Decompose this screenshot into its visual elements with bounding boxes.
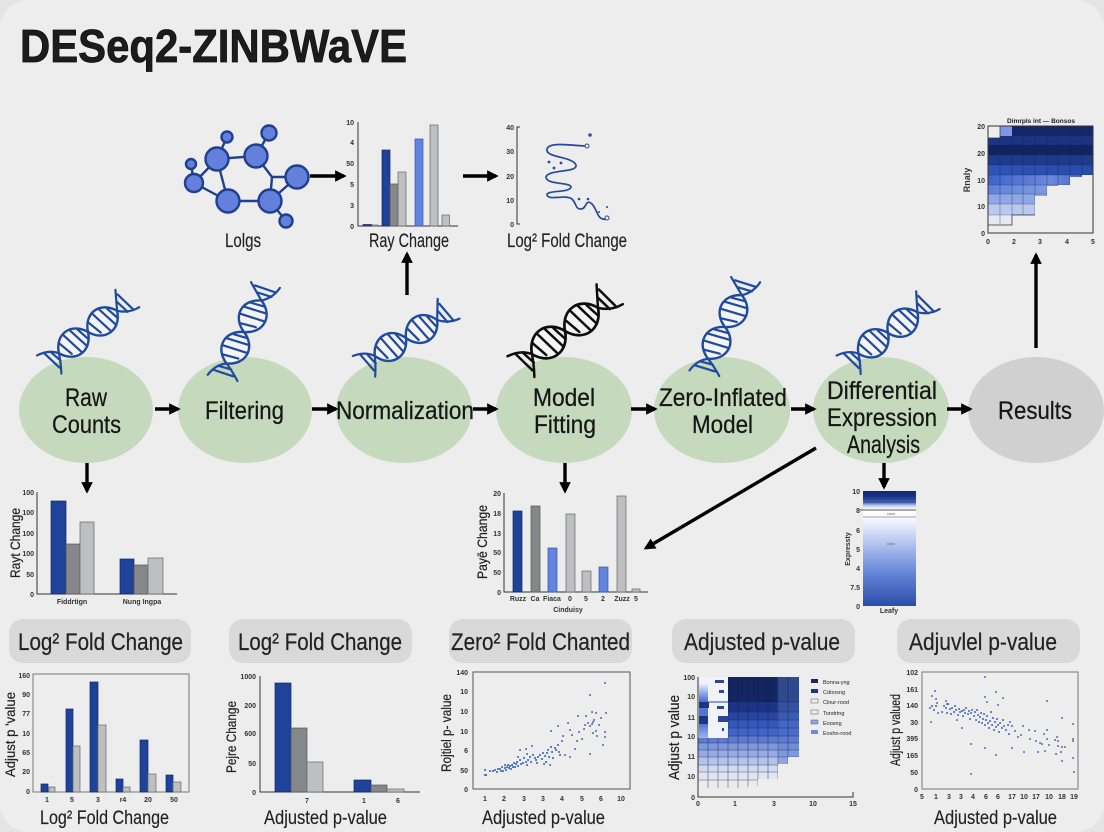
chart: bottom heatmap with legend: 11 xyxy=(688,715,695,722)
arrow: differential to middle chart xyxy=(646,448,816,548)
chart: grouped bars bottom: 200 xyxy=(244,703,256,710)
chart: grouped bars bottom: Pejre Change xyxy=(223,701,239,773)
chart: top right heatmap: 10 xyxy=(977,204,985,211)
node: results: Results xyxy=(998,397,1072,425)
arrow: normalization to model fitting xyxy=(473,407,496,411)
chart: top right heatmap: Rnaly xyxy=(962,168,972,192)
chart: paired bars bottom left: 5 xyxy=(70,797,74,804)
chart: falling scatter plot: 30 xyxy=(910,720,918,727)
chart: rising scatter plot: 5 xyxy=(580,796,584,803)
chart: model fitting bars: 18 xyxy=(493,511,501,518)
node: differential expression analysis xyxy=(813,357,949,463)
chart: paired bars bottom left xyxy=(2,673,189,804)
chart: top right heatmap: Dimrpls int — Bonsos xyxy=(1007,118,1075,125)
chart: paired bars bottom left: 0 xyxy=(26,789,30,796)
chart: falling scatter plot: 17 xyxy=(1008,794,1016,801)
chart: paired bars bottom left: 10 xyxy=(22,731,30,738)
chart: bottom heatmap with legend: 10 xyxy=(687,694,695,701)
chart: gradient column xyxy=(845,489,916,615)
chart: bottom heatmap with legend: 100 xyxy=(683,675,695,682)
pill heading 3 xyxy=(449,619,632,663)
chart: bottom heatmap with legend: 10 xyxy=(809,801,817,808)
chart: falling scatter plot: 19 xyxy=(1070,794,1078,801)
chart: model fitting bars: Fiaca xyxy=(543,596,561,603)
icon: DNA helix filtering xyxy=(202,274,287,389)
pill heading 1 xyxy=(9,619,191,663)
chart: top bar chart: 10 xyxy=(346,120,354,127)
chart: raw counts bars xyxy=(7,490,177,606)
chart: bottom heatmap with legend: 0 xyxy=(691,795,695,802)
heatmap legend: Eoshn-rood xyxy=(823,731,851,737)
chart: raw counts bars: 0 xyxy=(30,592,34,599)
chart: gradient column: Expressty xyxy=(845,532,852,566)
node: zero-inflated model xyxy=(654,357,790,463)
chart: grouped bars bottom xyxy=(223,674,420,805)
chart: model fitting bars: Payē Change xyxy=(474,505,490,579)
chart: bottom heatmap with legend: 3 xyxy=(772,801,776,808)
chart: model fitting bars: 0 xyxy=(497,590,501,597)
chart: falling scatter plot: 5 xyxy=(920,794,924,801)
chart: paired bars bottom left: 65 xyxy=(22,750,30,757)
chart: gradient column: 6 xyxy=(856,528,860,535)
chart: paired bars bottom left: 20 xyxy=(22,769,30,776)
chart: gradient column: 7.5 xyxy=(850,585,860,592)
chart: model fitting bars xyxy=(474,491,648,614)
chart: top right heatmap: 3 xyxy=(1038,239,1042,246)
x label bottom chart 2: Adjusted p-value xyxy=(264,808,387,829)
network label: Lolgs xyxy=(225,231,261,252)
node: model fitting xyxy=(496,357,632,463)
chart: top right heatmap: 0 xyxy=(981,231,985,238)
chart: falling scatter plot: 165 xyxy=(906,753,918,760)
icon: molecule network xyxy=(185,126,308,228)
arrow: bar chart to curve xyxy=(463,174,496,178)
chart: falling scatter plot: 3 xyxy=(947,794,951,801)
chart: model fitting bars: Ruzz xyxy=(510,596,527,603)
chart: rising scatter plot: 10 xyxy=(617,796,625,803)
chart: grouped bars bottom: 6 xyxy=(396,798,400,805)
chart: top right heatmap: 0 xyxy=(986,239,990,246)
chart: raw counts bars: 100 xyxy=(22,510,34,517)
heatmap legend: Clour-rood xyxy=(823,700,849,706)
chart: rising scatter plot: 6 xyxy=(464,748,468,755)
chart: paired bars bottom left: 77 xyxy=(22,711,30,718)
chart: model fitting bars: 20 xyxy=(493,491,501,498)
chart: bottom heatmap with legend: 0 xyxy=(696,801,700,808)
node: model fitting: Model xyxy=(533,384,595,412)
node: normalization xyxy=(336,357,474,463)
chart: rising scatter plot xyxy=(438,670,630,803)
chart: raw counts bars: Fiddrtign xyxy=(57,599,87,606)
node: raw counts xyxy=(19,357,153,463)
chart: fold change curve xyxy=(506,125,609,229)
x label bottom chart 3: Adjusted p-value xyxy=(482,808,605,829)
chart: rising scatter plot: 6 xyxy=(599,796,603,803)
arrow: model fitting to zero-inflated xyxy=(631,407,655,411)
arrow: results up to heatmap xyxy=(1034,255,1038,348)
chart: top right heatmap: 2 xyxy=(1012,239,1016,246)
chart: model fitting bars: 50 xyxy=(493,550,501,557)
chart: top bar chart: 0 xyxy=(350,224,354,231)
chart: rising scatter plot: 10 xyxy=(460,729,468,736)
chart: model fitting bars: 5 xyxy=(634,596,638,603)
node: zero-inflated model: Model xyxy=(692,411,753,439)
chart: top bar chart: 3 xyxy=(350,203,354,210)
chart: gradient column: 8 xyxy=(856,508,860,515)
chart: bottom heatmap with legend: 10 xyxy=(687,734,695,741)
chart: falling scatter plot: 161 xyxy=(906,687,918,694)
chart: rising scatter plot: 3 xyxy=(522,796,526,803)
chart: rising scatter plot: 10 xyxy=(460,709,468,716)
heatmap legend: Bonna-yng xyxy=(823,680,850,686)
chart: top right heatmap: 20 xyxy=(977,124,985,131)
chart: falling scatter plot: 4 xyxy=(971,794,975,801)
chart: falling scatter plot: 0 xyxy=(914,787,918,794)
chart: grouped bars bottom: 7 xyxy=(305,798,309,805)
chart: fold change curve: 10 xyxy=(506,198,514,205)
chart: falling scatter plot: 50 xyxy=(910,770,918,777)
node: raw counts: Counts xyxy=(52,411,121,439)
chart: bottom heatmap with legend: 10 xyxy=(687,774,695,781)
chart: top bar chart: 5 xyxy=(350,182,354,189)
chart: bottom heatmap with legend: Adjust p value xyxy=(666,695,683,780)
chart: rising scatter plot: Rojtiel p- value xyxy=(438,694,454,772)
chart: gradient column: 4 xyxy=(856,566,860,573)
chart: model fitting bars: 0 xyxy=(568,596,572,603)
chart: gradient column: Leafy xyxy=(880,608,898,615)
chart: falling scatter plot: Adjust p valued xyxy=(887,694,903,766)
arrow: zero-inflated to differential xyxy=(791,407,814,411)
pill heading 1: Log² Fold Change xyxy=(18,629,183,656)
chart: falling scatter plot: 6 xyxy=(996,794,1000,801)
icon: DNA helix zero inflated xyxy=(683,269,767,384)
chart: falling scatter plot: 6 xyxy=(984,794,988,801)
chart: raw counts bars: 100 xyxy=(22,490,34,497)
chart: fold change curve: 0 xyxy=(510,222,514,229)
arrow: raw counts to filtering xyxy=(155,407,178,411)
pill heading 5 xyxy=(897,619,1080,663)
chart: paired bars bottom left: 90 xyxy=(22,692,30,699)
arrow: normalization up to bar chart xyxy=(405,254,409,295)
chart: top bar chart: 4 xyxy=(350,140,354,147)
icon: DNA helix differential xyxy=(833,286,944,379)
node: differential expression analysis: Differential xyxy=(827,377,937,405)
chart: top right heatmap: 20 xyxy=(977,151,985,158)
chart: falling scatter plot: 140 xyxy=(906,703,918,710)
pill heading 2: Log² Fold Change xyxy=(238,629,402,656)
chart: grouped bars bottom: 600 xyxy=(244,731,256,738)
node: results xyxy=(968,357,1104,463)
heatmap legend: Tondrtng xyxy=(823,711,844,717)
x label bottom chart 5: Adjusted p-value xyxy=(934,808,1057,829)
chart: top bar chart xyxy=(346,120,458,231)
pill heading 4 xyxy=(672,619,855,663)
chart: top right heatmap xyxy=(962,118,1095,246)
chart: fold change curve: 30 xyxy=(506,149,514,156)
chart: paired bars bottom left: 50 xyxy=(170,797,178,804)
chart: grouped bars bottom: 1000 xyxy=(240,674,256,681)
heatmap legend xyxy=(811,679,851,737)
chart: bottom heatmap with legend: 1 xyxy=(733,801,737,808)
chart: top right heatmap: 10 xyxy=(977,178,985,185)
chart: rising scatter plot: 1 xyxy=(483,796,487,803)
chart: model fitting bars: 50 xyxy=(493,570,501,577)
chart: paired bars bottom left: 20 xyxy=(144,797,152,804)
node: filtering xyxy=(178,357,312,463)
chart: paired bars bottom left: 160 xyxy=(18,673,30,680)
curve label: Log² Fold Change xyxy=(507,231,627,252)
pill heading 5: Adjuvlel p-value xyxy=(909,629,1057,656)
title: DESeq2-ZINBWaVE xyxy=(20,20,407,72)
chart: raw counts bars: Nung Ingpa xyxy=(123,599,161,606)
chart: model fitting bars: Ca xyxy=(531,596,540,603)
chart: falling scatter plot: 18 xyxy=(1058,794,1066,801)
chart: top right heatmap: 4 xyxy=(1065,239,1069,246)
chart: gradient column: 10 xyxy=(852,489,860,496)
chart: grouped bars bottom: 0 xyxy=(252,790,256,797)
pill heading 2 xyxy=(229,619,412,663)
chart: falling scatter plot xyxy=(887,670,1078,801)
heatmap legend: Cdoosng xyxy=(823,690,845,696)
x label bottom chart 1: Log² Fold Change xyxy=(40,808,169,829)
arrow: raw counts down xyxy=(85,463,89,491)
node: filtering: Filtering xyxy=(205,397,284,425)
icon: DNA helix normalization xyxy=(349,294,463,381)
icon: DNA helix model fitting xyxy=(503,279,628,383)
chart: top bar chart: 50 xyxy=(346,161,354,168)
chart: raw counts bars: 100 xyxy=(22,551,34,558)
node: model fitting: Fitting xyxy=(534,411,596,439)
arrow: differential down xyxy=(882,463,886,487)
chart: falling scatter plot: 102 xyxy=(906,670,918,677)
chart: rising scatter plot: 140 xyxy=(456,670,468,677)
chart: falling scatter plot: 10 xyxy=(1045,794,1053,801)
chart: gradient column: 5 xyxy=(856,547,860,554)
pill heading 3: Zero² Fold Chanted xyxy=(451,629,630,656)
icon: DNA helix raw counts xyxy=(33,285,144,379)
chart: model fitting bars: Zuzz xyxy=(614,596,630,603)
arrow: network to bar chart xyxy=(310,174,344,178)
arrow: differential to results xyxy=(947,407,970,411)
chart: paired bars bottom left: 1 xyxy=(45,797,49,804)
chart: gradient column: 0 xyxy=(856,604,860,611)
node: raw counts: Raw xyxy=(65,384,108,412)
chart: bottom heatmap with legend: 11 xyxy=(688,754,695,761)
chart: paired bars bottom left: Adjust p 'value xyxy=(2,692,18,777)
pill heading 4: Adjusted p-value xyxy=(684,629,840,656)
bar chart label: Ray Change xyxy=(369,231,449,252)
arrow: model fitting down xyxy=(563,463,567,491)
chart: rising scatter plot: 4 xyxy=(560,796,564,803)
chart: rising scatter plot: 2 xyxy=(502,796,506,803)
node: zero-inflated model: Zero-Inflated xyxy=(659,384,787,412)
chart: fold change curve: 40 xyxy=(506,125,514,132)
chart: rising scatter plot: 50 xyxy=(460,768,468,775)
chart: raw counts bars: 100 xyxy=(22,531,34,538)
chart: model fitting bars: 5 xyxy=(584,596,588,603)
node: normalization: Normalization xyxy=(336,397,474,425)
chart: top right heatmap: 5 xyxy=(1091,239,1095,246)
node: differential expression analysis: Analysis xyxy=(847,431,920,459)
chart: raw counts bars: Rayt Change xyxy=(7,508,23,578)
chart: grouped bars bottom: 50 xyxy=(248,761,256,768)
chart: falling scatter plot: 17 xyxy=(1032,794,1040,801)
chart: paired bars bottom left: r4 xyxy=(120,797,126,804)
chart: bottom heatmap with legend: 15 xyxy=(849,801,857,808)
chart: model fitting bars: 13 xyxy=(493,531,501,538)
chart: model fitting bars: Cinduisy xyxy=(553,607,583,614)
chart: rising scatter plot: 10 xyxy=(460,689,468,696)
node: differential expression analysis: Expression xyxy=(827,404,937,432)
chart: rising scatter plot: 3 xyxy=(541,796,545,803)
chart: falling scatter plot: 3 xyxy=(959,794,963,801)
heatmap legend: Eoosng xyxy=(823,721,842,727)
chart: raw counts bars: 50 xyxy=(26,572,34,579)
chart: falling scatter plot: 10 xyxy=(1020,794,1028,801)
chart: falling scatter plot: 395 xyxy=(906,736,918,743)
chart: rising scatter plot: 0 xyxy=(464,787,468,794)
chart: falling scatter plot: 1 xyxy=(934,794,938,801)
arrow: filtering to normalization xyxy=(312,407,336,411)
chart: grouped bars bottom: 1 xyxy=(362,798,366,805)
chart: fold change curve: 20 xyxy=(506,174,514,181)
heatmap inset xyxy=(698,677,728,738)
chart: bottom heatmap with legend xyxy=(666,675,857,808)
chart: model fitting bars: 2 xyxy=(601,596,605,603)
chart: paired bars bottom left: 3 xyxy=(96,797,100,804)
